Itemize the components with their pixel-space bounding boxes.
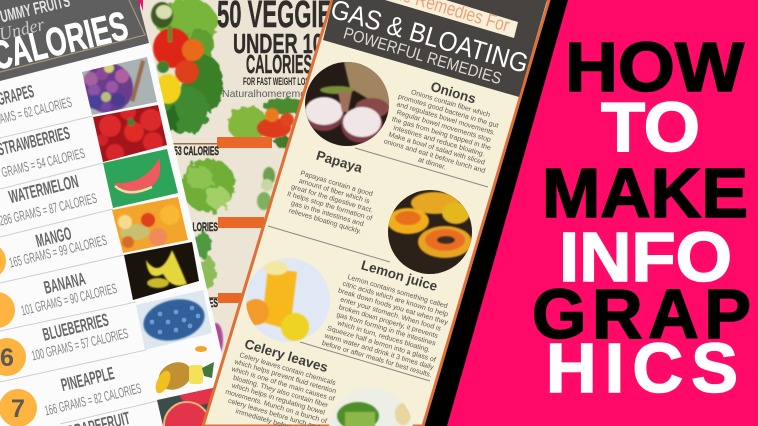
text: lemon paragraph: warm water and drink it 3 times daily [323, 332, 435, 372]
divider [300, 342, 430, 381]
image: celery [328, 386, 414, 426]
number badge 7: 7 [11, 395, 25, 423]
text: lemon paragraph: Squeeze half a lemon into a glass of [326, 325, 436, 364]
divider [268, 226, 390, 262]
image: grapes [82, 57, 157, 115]
text: lemon paragraph: which in turn, reduces bloating. [335, 320, 431, 354]
heading: celery leaves: Celery leaves [243, 336, 330, 375]
heading: papaya: Papaya [314, 148, 365, 176]
text: papaya paragraph [286, 170, 374, 236]
title word: HICS: HICS [546, 329, 738, 407]
number badge 6: 6 [0, 344, 14, 372]
text: celery paragraph: which helps prevent fluid retention [232, 358, 337, 395]
icon: top vegetable pile [151, 0, 223, 134]
number badge 7 [0, 389, 37, 426]
panel: white list body [0, 42, 224, 426]
title word: TO: TO [601, 88, 700, 166]
text: onions paragraph: at dinner. [417, 157, 447, 172]
row: strawberries [0, 123, 86, 184]
icon: lettuce [181, 158, 235, 288]
text: calories label three: 53 CALORIES [173, 296, 218, 310]
row: mango [7, 223, 108, 271]
text: onions paragraph: Regular bowel movements stop [396, 109, 492, 144]
row: pineapple: PINEAPPLE [59, 363, 116, 395]
text: lemon paragraph: gas from forming in the intestines [336, 312, 437, 348]
bar: orange marker one [217, 137, 272, 148]
panel: fruits infographic [0, 0, 224, 426]
text: website: Naturalhomeremedies.com [222, 88, 348, 100]
row: pineapple: 166 GRAMS = 82 CALORIES [43, 380, 143, 418]
row: blueberries [30, 310, 130, 363]
text: onions paragraph: the gas from being trapped in the [391, 116, 492, 152]
text: onions paragraph: Onions contain fiber which [410, 89, 491, 119]
row: watermelon: WATERMELON [7, 171, 80, 207]
heading: onions: Onions [429, 79, 478, 106]
image: onions [305, 62, 389, 146]
row: watermelon [0, 171, 98, 229]
text: lemon paragraph: citric acids which are known to help [342, 281, 449, 319]
text: lemon paragraph: Lemon contains something called [347, 274, 448, 310]
text: calories label two: 53 CALORIES [173, 220, 218, 234]
icon: purple cabbage [214, 322, 224, 353]
title: how to make infographics [532, 28, 751, 407]
panel: dark header [323, 0, 547, 97]
heading: lemon juice: Lemon juice [359, 257, 440, 294]
text: celery paragraph: Celery leaves contain chemicals [238, 352, 337, 387]
text: onions paragraph: Make a bowl of salad with sliced [388, 132, 486, 167]
panel: vegetables infographic [140, 0, 330, 356]
text: onions paragraph [383, 89, 499, 175]
heading: under 100: UNDER 100 [233, 28, 333, 59]
text: onions paragraph: and regulates bowel movements. [396, 101, 496, 137]
text: onions paragraph: onions and eat it before lunch and [383, 138, 486, 175]
panel: vegetables infographic: CALORIES [246, 49, 312, 79]
text: lemon paragraph: break down foods you eat when they [337, 288, 449, 327]
text: onions paragraph: promotes good bacteria in the gut [397, 93, 499, 130]
text: papaya paragraph: amount of fiber which is [298, 178, 371, 206]
text: papaya paragraph: Papayas contain a good [299, 170, 374, 198]
title word: HOW: HOW [565, 28, 744, 106]
text: celery paragraph [224, 352, 337, 426]
pink corner [139, 0, 143, 11]
row: watermelon: 286 GRAMS = 87 CALORIES [0, 190, 98, 229]
text: celery paragraph: movements. Munch on a bunch of [224, 389, 328, 425]
text: papaya paragraph: great for the digestive tract. [290, 184, 374, 214]
text: lemon paragraph: enter your stomach. When food is [339, 296, 442, 333]
icon: middle vegetable pile [228, 98, 307, 148]
text: lemon paragraph [321, 274, 449, 379]
row: banana [19, 269, 118, 318]
number badge 5 [0, 292, 15, 328]
bar: thin rule one [173, 143, 217, 144]
image: lemon juice [243, 257, 331, 343]
text: celery paragraph: which is one of the main causes of [230, 366, 335, 403]
text: lemon paragraph: before or after meals for best results. [321, 340, 433, 379]
text: calories label one: 53 CALORIES [174, 144, 219, 158]
text: lemon paragraph: broken down properly, it prevents [338, 304, 439, 340]
text: papaya paragraph: relieves bloating quickly. [288, 208, 362, 236]
image: mango [112, 197, 188, 253]
bar: orange marker three [218, 293, 244, 303]
panel: cream body with orange border [203, 0, 549, 426]
image: banana [124, 242, 199, 300]
image: papaya [388, 190, 472, 274]
row: banana: BANANA [42, 269, 87, 298]
title word: INFO: INFO [559, 218, 732, 296]
title word: GRAP: GRAP [532, 275, 751, 353]
panel: grey header [0, 0, 149, 81]
text: celery paragraph: which helps in regulating bowel [230, 382, 326, 417]
banner: cream label [385, 0, 518, 38]
row: blueberries: 100 GRAMS = 57 CALORIES [30, 325, 130, 363]
image: blueberries [136, 290, 212, 350]
text: for fast weight loss: FOR FAST WEIGHT LOSS [243, 76, 313, 88]
title word: MAKE: MAKE [542, 154, 748, 232]
row: banana: 101 GRAMS = 90 CALORIES [19, 280, 118, 318]
text: papaya paragraph: It helps stop the formation of [286, 191, 373, 222]
row: mango: 165 GRAMS = 99 CALORIES [7, 232, 108, 271]
icon: cucumbers [257, 167, 275, 210]
bar: orange marker two [218, 217, 264, 228]
panel: black diagonal band [420, 0, 568, 426]
row: blueberries: BLUEBERRIES [41, 310, 111, 345]
number badge 4 [0, 243, 6, 279]
divider lines [0, 116, 157, 424]
row: pineapple [43, 363, 143, 418]
image: strawberries [93, 105, 167, 162]
row: grapes [0, 81, 73, 133]
panel: gas and bloating infographic [203, 0, 549, 426]
text: celery paragraph: bloating. They also contain fiber [232, 375, 329, 410]
text: papaya paragraph: gas in the intestines and [290, 200, 365, 228]
decorative header border [0, 0, 145, 72]
bar: thin rule three [208, 297, 218, 298]
image: grapefruit [157, 388, 213, 426]
number badge 6 [0, 338, 26, 376]
image: pineapple [152, 346, 214, 395]
image: watermelon [103, 149, 178, 208]
row: mango: MANGO [34, 223, 73, 251]
heading: powerful remedies: POWERFUL REMEDIES [341, 24, 504, 88]
text: onions paragraph: intestines and reduce bloating. [392, 125, 485, 158]
divider [355, 148, 488, 187]
